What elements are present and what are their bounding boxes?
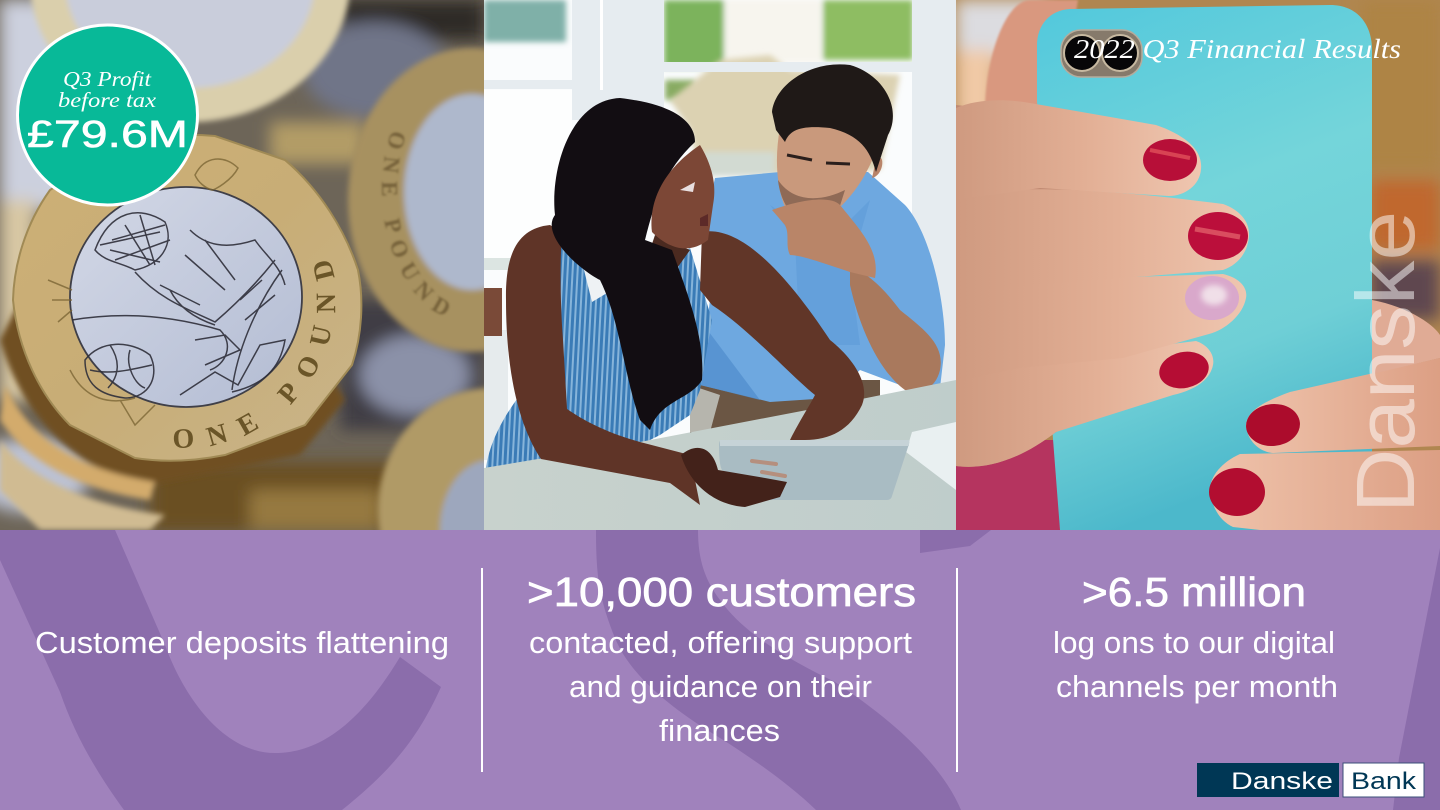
logo: Danske Bank — [1197, 763, 1424, 797]
window foliage — [484, 0, 913, 100]
badge: Q3 profit before tax — [18, 25, 198, 205]
man — [690, 64, 945, 435]
finger 1 — [956, 100, 1201, 200]
window frames — [484, 0, 956, 385]
face — [652, 145, 714, 248]
cushions — [670, 55, 900, 176]
woman's hand on tablet — [681, 448, 787, 507]
coin stack edge — [0, 300, 345, 530]
badge: Q3 profit before tax: Q3 Profit — [63, 67, 152, 91]
photo: hand holding turquoise phone — [956, 0, 1440, 530]
right coin — [345, 44, 484, 356]
logo: Danske Bank: Bank — [1351, 768, 1417, 795]
coin lettering: ONE POUND — [174, 261, 336, 448]
finger 6 — [1209, 450, 1440, 530]
finger base — [956, 105, 1080, 467]
stat: customer deposits: Customer deposits flattening — [35, 625, 449, 660]
hand on chin — [772, 200, 876, 278]
photo: couple with tablet — [484, 0, 956, 530]
thumb behind phone — [985, 0, 1078, 110]
right coin lettering: ONE POUND — [381, 132, 450, 315]
inner silver disc — [70, 187, 302, 407]
left window glass — [484, 90, 572, 260]
top coin — [30, 0, 350, 122]
right arm — [700, 231, 864, 440]
right background hand edge — [1372, 300, 1440, 374]
logo: Danske Bank: Danske — [1231, 768, 1333, 795]
stat: customers contacted: and guidance on their — [569, 669, 872, 704]
bottom right coin — [376, 384, 484, 530]
finger 2 — [956, 189, 1249, 292]
tablet — [719, 440, 909, 500]
paper — [906, 422, 956, 490]
stat: digital log ons: channels per month — [1056, 669, 1338, 704]
stat: digital log ons: log ons to our digital — [1053, 625, 1335, 660]
engraved plants — [72, 213, 285, 398]
face — [776, 127, 872, 206]
stat: customers contacted: finances — [659, 713, 780, 748]
chest — [652, 235, 690, 267]
stat: digital log ons — [1053, 569, 1338, 704]
hair — [772, 64, 893, 172]
stat: digital log ons: >6.5 million — [1082, 569, 1306, 615]
purple stats band — [0, 530, 1440, 810]
finger 5 — [1244, 358, 1440, 453]
woman — [506, 98, 864, 505]
background letter shapes — [0, 530, 1440, 810]
striped dress — [486, 225, 712, 468]
finger 3 — [956, 274, 1246, 382]
forearm — [850, 265, 941, 392]
pink background — [956, 440, 1066, 530]
table — [484, 380, 956, 530]
camera module — [1061, 30, 1142, 77]
badge: Q3 profit before tax: before tax — [58, 88, 157, 112]
photo: pound coins — [0, 0, 484, 530]
main one pound coin — [12, 134, 362, 462]
title: 2022 Q3 Financial Results: 2022 Q3 Financial Results — [1074, 34, 1401, 64]
hair — [552, 98, 702, 430]
stat: customers contacted — [527, 569, 916, 748]
left arm — [506, 225, 700, 505]
shirt — [700, 172, 945, 402]
finger 4 — [956, 341, 1213, 467]
badge: Q3 profit before tax: £79.6M — [27, 114, 188, 156]
phone body — [1037, 5, 1372, 530]
stat: customers contacted: contacted, offering support — [529, 625, 912, 660]
stat: customers contacted: >10,000 customers — [527, 569, 916, 615]
collar — [584, 270, 606, 302]
vertical watermark: Danske: Danske — [1339, 211, 1432, 513]
divider lines — [481, 568, 483, 772]
rim engravings — [48, 159, 238, 425]
